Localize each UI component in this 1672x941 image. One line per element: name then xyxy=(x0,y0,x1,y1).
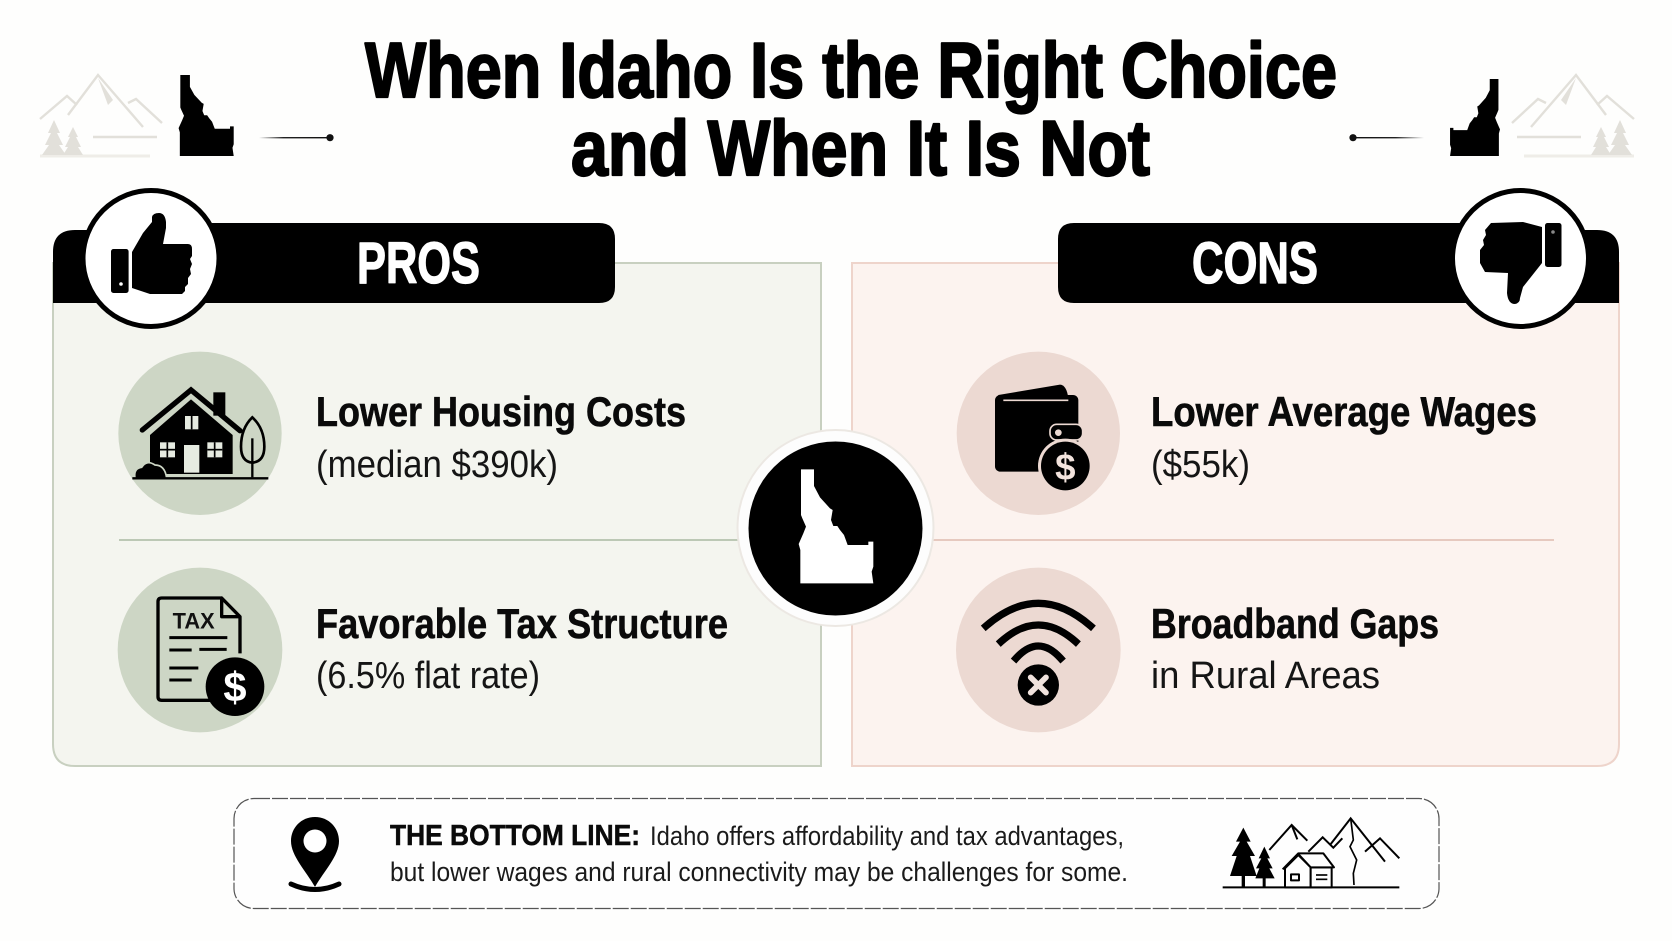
callout text: THE BOTTOM LINE: xyxy=(390,820,640,852)
callout text: Idaho offers affordability and tax advantages, xyxy=(650,821,1124,851)
cons header label: CONS xyxy=(1192,231,1318,296)
icon: map pin xyxy=(291,817,339,890)
pros header bar xyxy=(53,223,615,303)
panel: pros xyxy=(53,190,821,766)
detail: ($55k) xyxy=(1151,444,1250,486)
pros thumbs-up badge xyxy=(83,190,219,326)
icon: house xyxy=(118,352,282,515)
cons item: lower average wages xyxy=(957,352,1537,515)
icon: wallet: $ xyxy=(1055,446,1076,487)
pros header label: PROS xyxy=(357,231,480,296)
icon: cabin and mountains xyxy=(1223,818,1399,887)
icon: tax document: $ xyxy=(223,664,247,711)
icon: wallet xyxy=(957,352,1120,515)
heading: Lower Average Wages xyxy=(1151,388,1537,435)
title xyxy=(365,26,1337,192)
icon: tax document: TAX xyxy=(173,608,215,633)
callout: bottom line xyxy=(234,798,1439,908)
cons panel background xyxy=(852,263,1619,766)
cons item: broadband gaps xyxy=(956,568,1439,732)
icon: tax document xyxy=(118,568,282,732)
icon: wifi with x xyxy=(956,568,1121,732)
left connector line xyxy=(259,134,334,141)
heading: Lower Housing Costs xyxy=(316,388,686,435)
center Idaho badge xyxy=(738,430,934,626)
title: and When It Is Not xyxy=(571,104,1150,192)
heading: Favorable Tax Structure xyxy=(316,600,728,647)
panel: cons xyxy=(852,190,1619,766)
shrub beside the house xyxy=(135,463,167,478)
callout dashed frame xyxy=(234,798,1439,908)
pros item: favorable tax structure xyxy=(118,568,728,732)
icon: right Idaho silhouette xyxy=(1450,79,1500,156)
right connector line xyxy=(1349,134,1424,141)
heading: Broadband Gaps xyxy=(1151,600,1439,647)
icon: left Idaho silhouette xyxy=(179,75,234,156)
detail: (6.5% flat rate) xyxy=(316,655,540,697)
icon: right mountains decoration xyxy=(1512,75,1634,156)
title: When Idaho Is the Right Choice xyxy=(365,26,1337,114)
callout text xyxy=(390,820,1128,887)
detail: (median $390k) xyxy=(316,444,558,486)
pros item: lower housing costs xyxy=(118,352,686,515)
divider xyxy=(925,539,1554,541)
pros panel background xyxy=(53,263,821,766)
divider xyxy=(119,539,745,541)
callout text: but lower wages and rural connectivity may be challenges for some. xyxy=(390,857,1128,887)
cons header bar xyxy=(1058,223,1619,303)
cons thumbs-down badge xyxy=(1452,190,1588,326)
detail: in Rural Areas xyxy=(1151,655,1380,697)
icon: left mountains decoration xyxy=(40,75,162,156)
